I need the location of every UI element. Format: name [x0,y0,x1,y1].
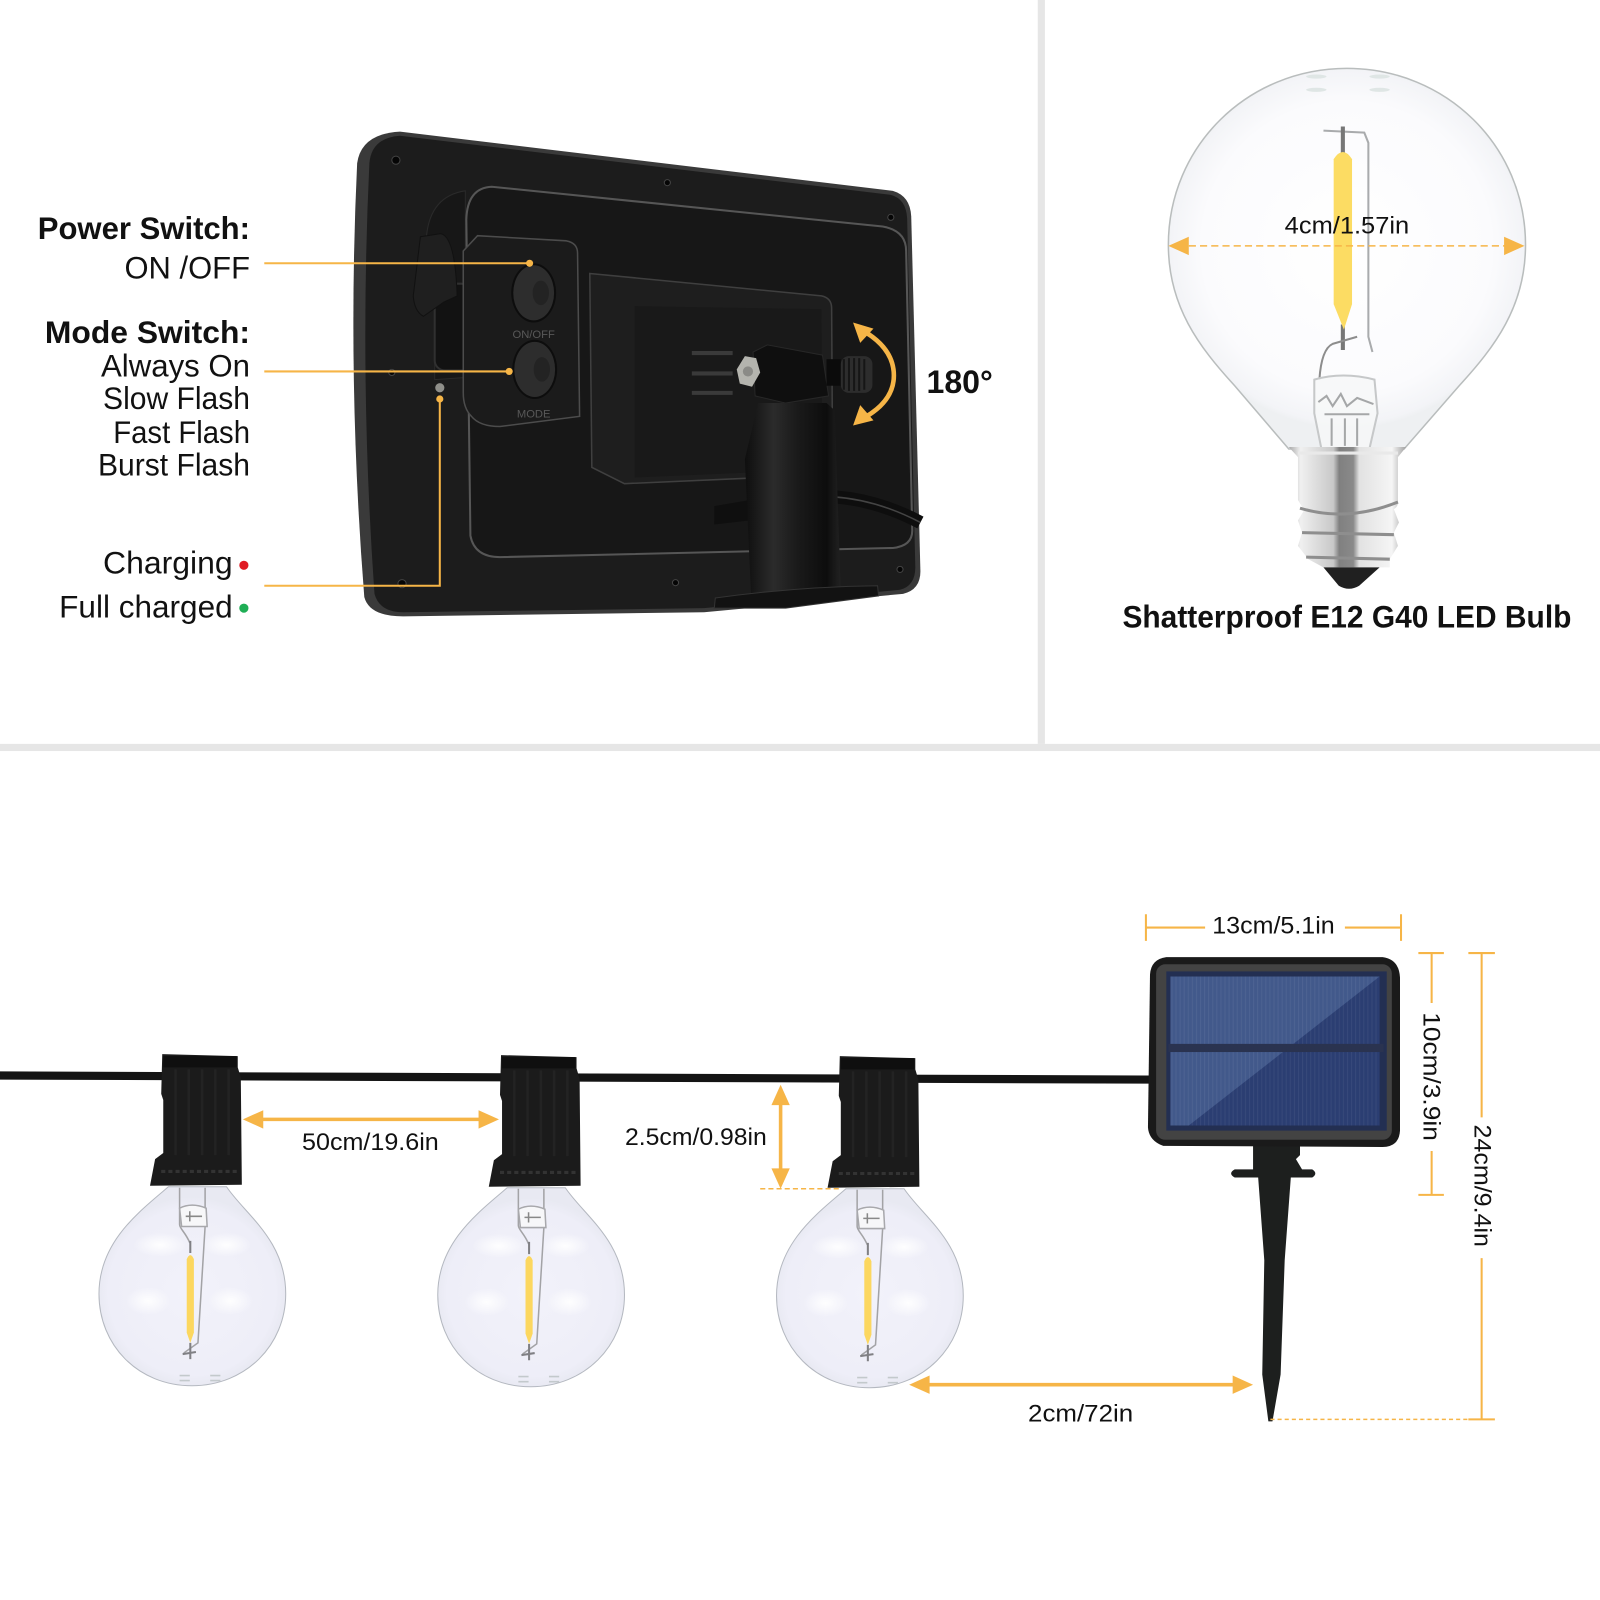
callout: mode switch: Always On [101,348,250,384]
callout: charging indicator: Charging [103,544,233,580]
USB port [435,284,471,370]
side channel [427,191,465,380]
bracket [692,345,920,608]
solar panel front [1148,957,1400,1421]
dimension: total height: 24cm/9.4in [1468,1124,1495,1247]
panel: string light dimensions [0,913,1495,1427]
callout: power switch [38,210,533,286]
panel: solar panel back view [353,132,920,616]
callout: mode switch: Slow Flash [103,380,250,416]
glass globe [1168,68,1526,449]
button plate [463,236,580,427]
dimension: bulb spacing [243,1110,499,1156]
rear box [590,273,833,484]
stake [1231,1145,1315,1421]
dimension: panel width: 13cm/5.1in [1212,913,1335,940]
screw base [1289,447,1406,589]
rubber plug [413,234,457,316]
frame [1148,957,1400,1147]
dimension: panel height: 10cm/3.9in [1417,1012,1444,1141]
panel housing [353,132,920,616]
dimension: socket height: 2.5cm/0.98in [625,1124,767,1151]
rotation label: 180° [927,363,993,400]
solar cells [1166,971,1387,1131]
dimension: lead cable: 2cm/72in [1028,1400,1133,1427]
cable [0,1076,1151,1080]
lamp 1 [99,1054,286,1386]
lamp 3 [777,1056,963,1388]
caption: Shatterproof E12 G40 LED Bulb [1122,599,1571,635]
callout: charging indicator [59,395,443,624]
button plate: MODE [517,408,551,420]
filament and support wires [1314,127,1378,449]
indicator LED [435,383,444,392]
glass highlights [1306,74,1390,92]
callout: charging indicator: Full charged [59,588,233,624]
callout: power switch: ON /OFF [124,250,250,286]
dimension: panel width [1146,913,1401,941]
dimension: lead cable [909,1376,1253,1427]
width dimension: 4cm/1.57in [1285,213,1409,240]
rotation arrow [853,322,894,426]
callout: mode switch [45,314,513,483]
callout: mode switch: Fast Flash [113,414,250,450]
dimension: socket height [625,1085,842,1189]
callout: power switch: Power Switch: [38,210,250,246]
raised back plate [466,187,912,557]
dimension: panel height [1417,953,1444,1195]
callout: mode switch: Burst Flash [98,447,250,483]
dimension: total height [1270,953,1495,1419]
callout: mode switch: Mode Switch: [45,314,250,350]
button plate: ON/OFF [512,329,555,341]
panel: large bulb [1122,68,1571,635]
lamp 2 [438,1055,624,1387]
dimension: bulb spacing: 50cm/19.6in [302,1129,439,1156]
width dimension [1168,213,1524,255]
screws [389,156,903,588]
panel dividers [0,0,1600,751]
